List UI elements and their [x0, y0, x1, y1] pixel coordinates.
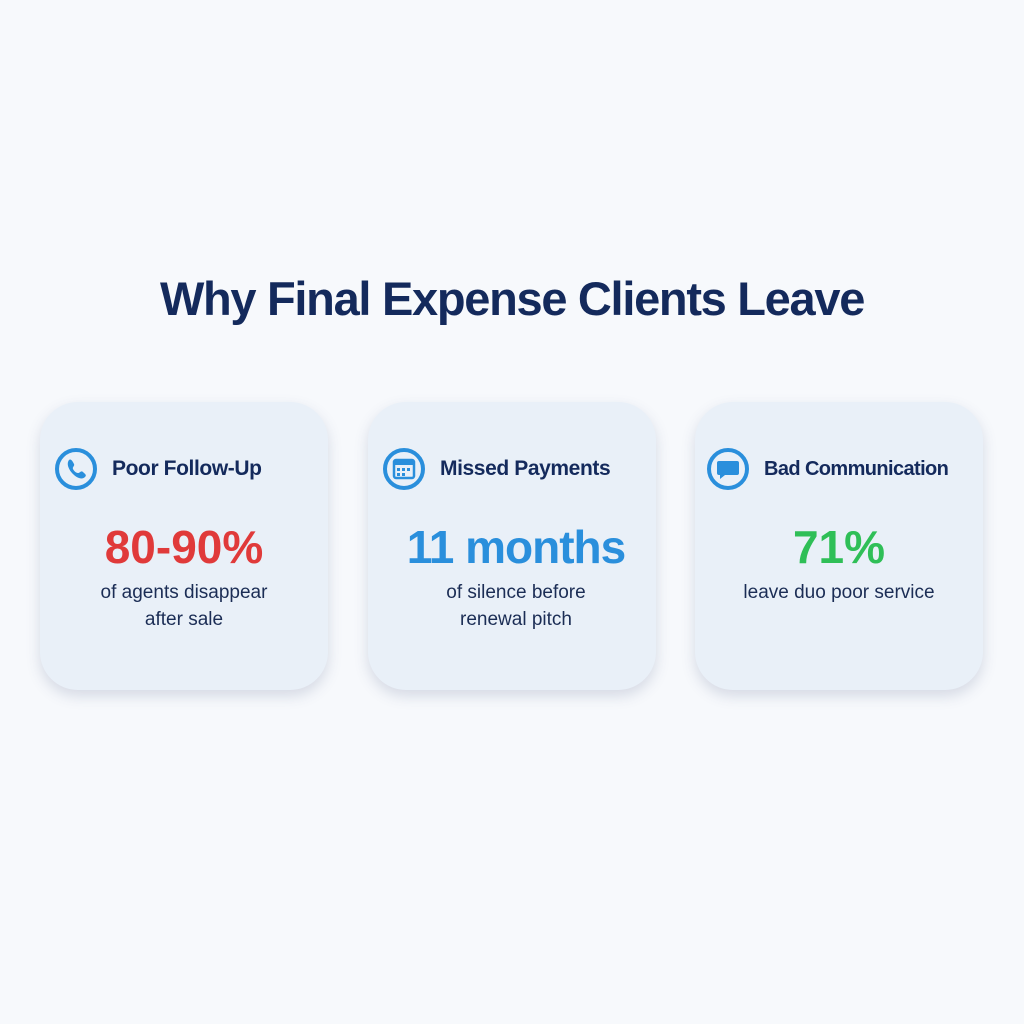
- text: after sale: [145, 609, 223, 630]
- text: renewal pitch: [460, 609, 572, 630]
- panel: poor follow-up: [40, 402, 328, 690]
- heading: poor follow-up: [55, 448, 262, 490]
- text: [101, 582, 268, 630]
- text: of silence before: [446, 582, 586, 603]
- text: of agents disappear: [101, 582, 267, 603]
- title: Why Final Expense Clients Leave: [160, 272, 864, 325]
- heading: missed payments: Missed Payments: [440, 457, 610, 480]
- heading: poor follow-up: Poor Follow-Up: [112, 457, 262, 480]
- text: [446, 582, 586, 630]
- heading: missed payments: [383, 448, 610, 490]
- text: leave duo poor service: [743, 582, 935, 603]
- stat: 11 months: 11 months: [407, 521, 625, 573]
- panel: missed payments: [368, 402, 656, 690]
- heading: bad communication: Bad Communication: [764, 458, 948, 480]
- stat: 80-90%: 80-90%: [105, 521, 263, 573]
- panel: bad communication: [695, 402, 983, 690]
- stat: 71%: 71%: [793, 521, 885, 573]
- heading: bad communication: [707, 448, 948, 490]
